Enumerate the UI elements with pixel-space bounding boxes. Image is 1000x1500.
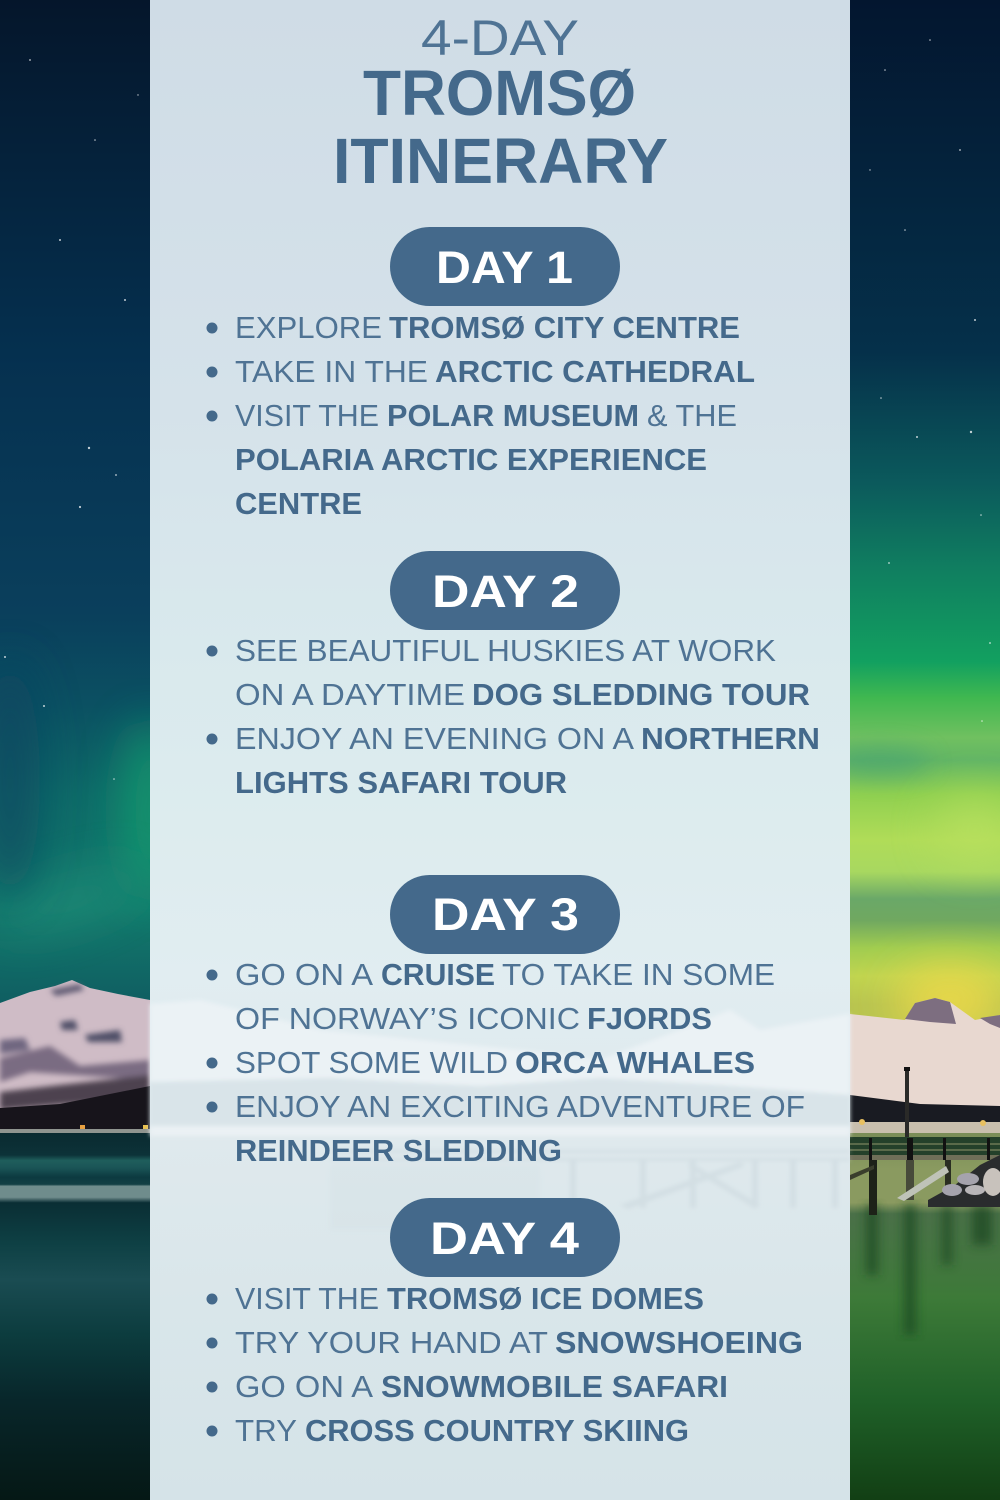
- right water: [850, 1133, 1000, 1500]
- day 2 list: ON A DAYTIME: [235, 677, 465, 712]
- day 4 list: [206, 1281, 803, 1448]
- day 1 list: CENTRE: [235, 486, 362, 521]
- title line: 4-DAY: 4-DAY: [421, 10, 579, 66]
- day 1 pill: DAY 1: [436, 242, 573, 293]
- day 4 list: CROSS COUNTRY SKIING: [305, 1413, 689, 1448]
- panel: translucent itinerary column: [150, 0, 850, 1500]
- right sky with aurora: [850, 66, 1000, 1020]
- title line: ITINERARY: ITINERARY: [333, 125, 668, 197]
- title line: TROMSØ: TROMSØ: [363, 57, 636, 129]
- left mountain: [0, 980, 150, 1133]
- day 1 list: POLAR MUSEUM: [387, 398, 639, 433]
- day 2 list: [206, 633, 820, 800]
- day 3 pill: DAY 3: [432, 889, 579, 940]
- day 1 list: TROMSØ CITY CENTRE: [389, 310, 740, 345]
- pier and rocks: [850, 1067, 1000, 1215]
- day 4 list: TROMSØ ICE DOMES: [387, 1281, 704, 1316]
- day 1 list: VISIT THE: [235, 398, 379, 433]
- day 3 list: CRUISE: [381, 957, 495, 992]
- day 3 list: REINDEER SLEDDING: [235, 1133, 562, 1168]
- day 1 list: EXPLORE: [235, 310, 382, 345]
- day 4 list: SNOWSHOEING: [555, 1325, 803, 1360]
- ghost mountains and pier behind panel: [150, 1000, 850, 1230]
- day 3 list: GO ON A: [235, 957, 373, 992]
- right mountain: [850, 998, 1000, 1133]
- day 3 pill: [390, 875, 620, 954]
- day 3 list: TO TAKE IN SOME: [502, 957, 775, 992]
- day 4 list: GO ON A: [235, 1369, 373, 1404]
- day 2 list: SEE BEAUTIFUL HUSKIES AT WORK: [235, 633, 776, 668]
- day 3 list: ENJOY AN EXCITING ADVENTURE OF: [235, 1089, 805, 1124]
- panel: day 2: [206, 551, 820, 800]
- panel: day 1: [206, 227, 755, 521]
- day 4 list: TRY YOUR HAND AT: [235, 1325, 548, 1360]
- day 2 pill: DAY 2: [432, 566, 579, 617]
- day 1 list: TAKE IN THE: [235, 354, 428, 389]
- day 3 list: FJORDS: [587, 1001, 712, 1036]
- day 3 list: [206, 957, 805, 1168]
- day 2 list: NORTHERN: [641, 721, 820, 756]
- day 1 pill: [390, 227, 620, 306]
- day 4 pill: DAY 4: [430, 1213, 579, 1264]
- day 3 list: ORCA WHALES: [515, 1045, 755, 1080]
- title: [333, 10, 668, 197]
- left sky with aurora: [0, 88, 150, 1003]
- day 3 list: SPOT SOME WILD: [235, 1045, 508, 1080]
- panel: day 3: [206, 875, 805, 1168]
- day 2 pill: [390, 551, 620, 630]
- day 3 list: OF NORWAY’S ICONIC: [235, 1001, 580, 1036]
- day 2 list: ENJOY AN EVENING ON A: [235, 721, 634, 756]
- day 2 list: LIGHTS SAFARI TOUR: [235, 765, 567, 800]
- day 1 list: ARCTIC CATHEDRAL: [435, 354, 755, 389]
- day 1 list: POLARIA ARCTIC EXPERIENCE: [235, 442, 707, 477]
- panel: day 4: [206, 1198, 803, 1448]
- day 4 pill: [390, 1198, 620, 1277]
- left water: [0, 1133, 150, 1500]
- day 1 list: & THE: [647, 398, 737, 433]
- day 4 list: SNOWMOBILE SAFARI: [381, 1369, 728, 1404]
- day 4 list: TRY: [235, 1413, 297, 1448]
- day 1 list: [206, 310, 755, 521]
- day 4 list: VISIT THE: [235, 1281, 379, 1316]
- day 2 list: DOG SLEDDING TOUR: [472, 677, 810, 712]
- stars: [4, 39, 991, 780]
